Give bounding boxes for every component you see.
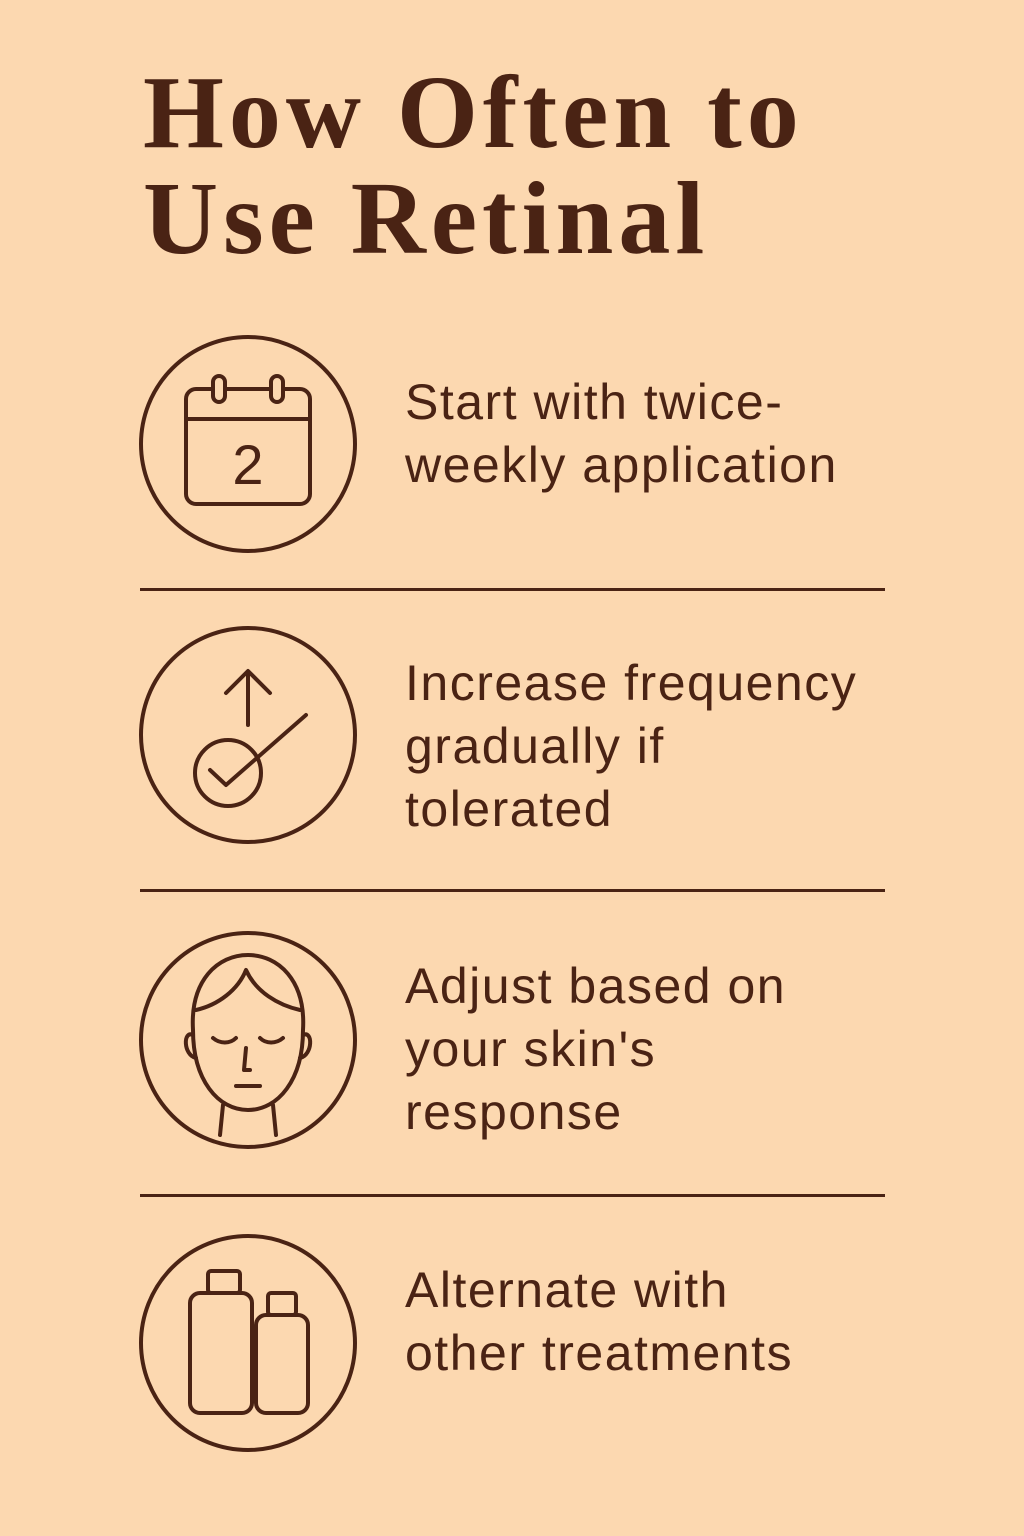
- text: step 2: gradually if: [405, 718, 665, 774]
- icon: arrow and check: [139, 626, 357, 844]
- text: step 4: [405, 1262, 793, 1381]
- icon: calendar: [139, 335, 357, 553]
- text: step 2: Increase frequency: [405, 655, 857, 711]
- title: How Often to: [143, 55, 804, 170]
- text: step 2: tolerated: [405, 781, 613, 837]
- text: step 1: weekly application: [405, 437, 838, 493]
- title: [143, 55, 804, 276]
- icon: face: [139, 931, 357, 1149]
- text: step 4: other treatments: [405, 1325, 793, 1381]
- text: step 3: [405, 958, 786, 1140]
- icon: bottles: [139, 1234, 357, 1452]
- text: step 4: Alternate with: [405, 1262, 729, 1318]
- text: step 3: your skin's: [405, 1021, 656, 1077]
- title: Use Retinal: [143, 161, 709, 276]
- text: step 1: Start with twice-: [405, 374, 783, 430]
- text: step 3: response: [405, 1084, 623, 1140]
- icon: calendar: 2: [232, 433, 264, 496]
- text: step 1: [405, 374, 838, 493]
- text: step 3: Adjust based on: [405, 958, 786, 1014]
- text: step 2: [405, 655, 857, 837]
